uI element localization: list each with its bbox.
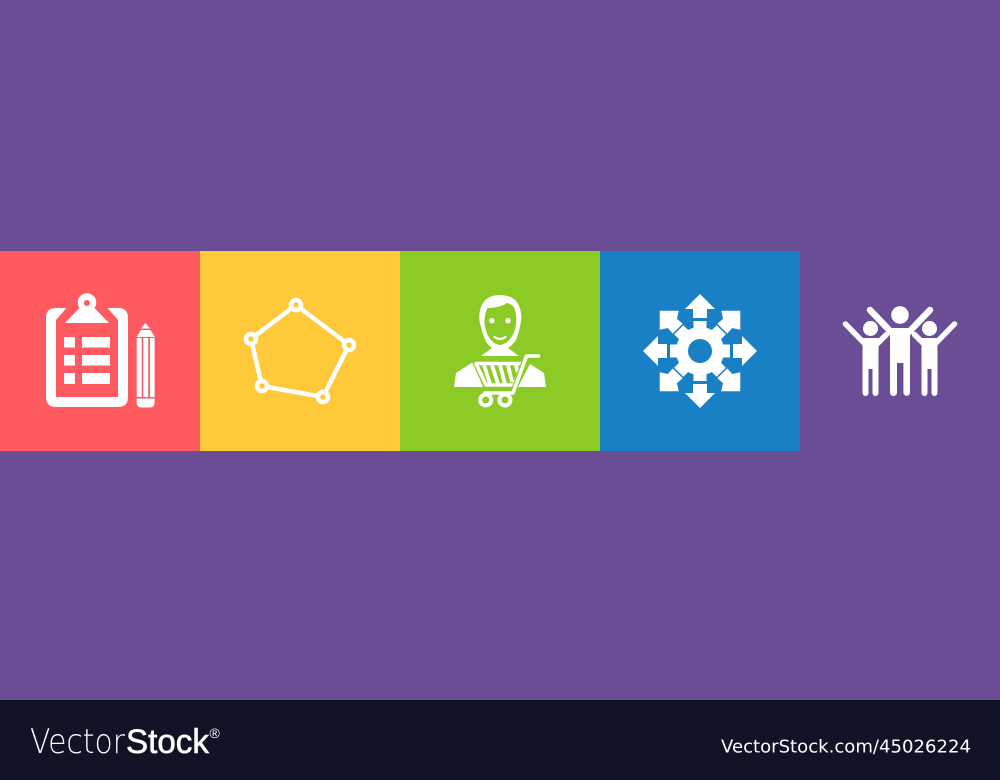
logo wordmark: Vector — [30, 722, 125, 762]
panel: shopper on green — [400, 251, 600, 451]
panel: pentagon on yellow — [200, 251, 400, 451]
logo wordmark — [30, 722, 210, 762]
footer bar — [0, 700, 1000, 780]
icon: gear with radiating arrows — [643, 294, 757, 408]
icon: man with shopping cart — [454, 295, 546, 406]
image id url: VectorStock.com/45026224 — [721, 738, 971, 758]
logo wordmark: Stock — [126, 723, 210, 761]
panel: clipboard on red — [0, 251, 200, 451]
icon: three people with raised arms — [846, 306, 954, 396]
icon: clipboard with pencil — [46, 293, 155, 408]
icon: pentagon nodes — [246, 300, 354, 402]
panel: gear on blue — [600, 251, 800, 451]
registered mark: ® — [210, 725, 220, 741]
